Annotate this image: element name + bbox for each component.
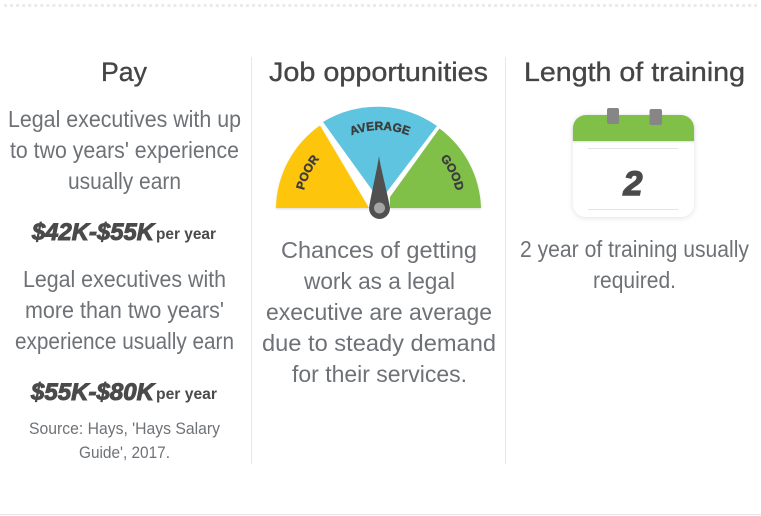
salary: 55K to 80K: per year [156, 386, 217, 403]
text block: more than two years: Legal executives with [23, 266, 226, 292]
source note [29, 419, 220, 462]
text block: training required [520, 236, 749, 293]
calendar number: 2 [623, 165, 643, 203]
salary: 55K to 80K [30, 379, 217, 406]
icon: calendar [573, 108, 694, 217]
text block: chances: for their services. [292, 361, 467, 387]
text block: chances: executive are average [266, 299, 492, 325]
text block: more than two years [15, 266, 234, 354]
panel: job opportunities [262, 57, 496, 387]
gauge label: good: GOOD [442, 155, 464, 190]
panel: length of training [520, 57, 749, 293]
text block: up to two years: to two years' experience [10, 137, 239, 163]
salary: 42K to 55K: per year [156, 226, 216, 243]
text block: chances: work as a legal [303, 268, 455, 294]
gauge chart [276, 106, 482, 219]
gauge segment: poor [276, 126, 369, 208]
text block: chances: due to steady demand [262, 330, 496, 356]
gauge segment: average [323, 107, 437, 201]
heading: job opportunities: Job opportunities [269, 57, 488, 87]
heading: length of training: Length of training [524, 57, 745, 87]
panel: pay [8, 57, 241, 462]
text block: more than two years: experience usually earn [15, 328, 234, 354]
salary: 42K to 55K: $42K-$55K [31, 219, 156, 246]
source note: Guide', 2017. [79, 443, 170, 462]
text block: up to two years: usually earn [68, 168, 181, 194]
salary: 55K to 80K: $55K-$80K [30, 379, 156, 406]
text block: more than two years: more than two years' [25, 297, 224, 323]
source note: Source: Hays, 'Hays Salary [29, 419, 220, 438]
salary: 42K to 55K [31, 219, 216, 246]
gauge segment: good [390, 128, 481, 208]
heading: pay: Pay [101, 57, 147, 87]
text block: chances: Chances of getting [281, 237, 477, 263]
gauge label: average: AVERAGE [351, 122, 411, 136]
text block: chances [262, 237, 496, 387]
text block: up to two years: Legal executives with up [8, 106, 241, 132]
gauge label: poor: POOR [296, 155, 320, 190]
gauge needle [369, 156, 390, 219]
text block: up to two years [8, 106, 241, 194]
text block: training required: required. [593, 267, 676, 293]
